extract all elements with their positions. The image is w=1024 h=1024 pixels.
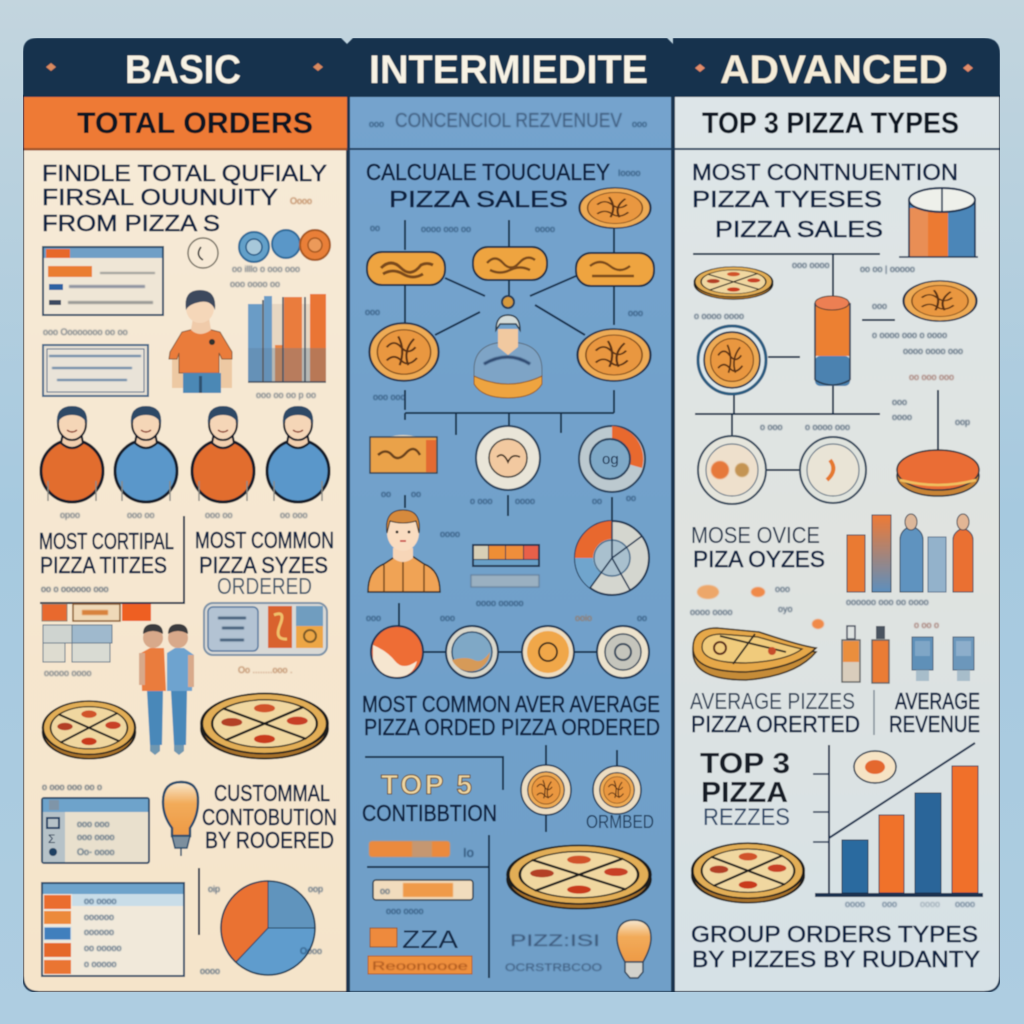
text block: group orders (691, 921, 980, 972)
rule box (365, 757, 503, 790)
panel: basic (23, 38, 347, 992)
window mockup: orders table (43, 247, 163, 315)
icon group: coins: oo illlo o ooo ooo (232, 264, 300, 274)
text block: calculate total pizza sales: CALCUALE TOUCUALEY (366, 159, 610, 185)
circle: step 1 (371, 626, 423, 678)
small captions: ooo (440, 613, 455, 623)
text block: calculate total pizza sales (366, 159, 641, 212)
icon: pizza oval (854, 751, 896, 783)
captions (365, 223, 643, 402)
pizza: oval right (904, 281, 976, 321)
circle: step 2 (446, 626, 498, 678)
donut chart (575, 521, 649, 595)
text block: most common pizza types: MOST CORTIPAL (39, 528, 174, 554)
captions: ooo (628, 308, 643, 318)
text block: most common pizza types: PIZZA TITZES (40, 552, 167, 578)
flow connectors (693, 254, 938, 470)
pill: pizza 3 (576, 253, 654, 286)
small orange marks and captions: oooo oooo (690, 607, 733, 617)
small orange marks and captions: oyo (778, 604, 793, 614)
table: query list: ooo oooo (77, 832, 115, 842)
icon: right header ornament (313, 63, 323, 71)
pizza: round left (369, 323, 439, 381)
layout rules (367, 835, 490, 978)
heading: top 3 pizza: TOP 3 (700, 748, 790, 780)
captions and stems: oo (626, 493, 636, 503)
bar chart: top pizzas: oooo (845, 899, 865, 909)
table: top contributors: oo oooo (84, 896, 117, 906)
icon group: coins: ooo oooo oo (230, 279, 280, 289)
pill: cream label: oo (380, 886, 390, 896)
bottom row icon: ring: og (602, 451, 619, 468)
heading: top 3 pizza: PIZZA (701, 777, 788, 809)
captions: ooo ooo (373, 392, 406, 402)
pill: pizza 1 (367, 252, 445, 285)
person in orange (139, 624, 166, 755)
pizza: wedge (693, 628, 816, 680)
captions and stems: oo (411, 489, 421, 499)
table: top contributors (42, 883, 184, 976)
small captions: ooio (575, 613, 592, 623)
captions (694, 260, 970, 432)
text block: calculate total pizza sales: Ioooo (618, 168, 641, 178)
text block: contribution by ordered: BY ROOERED (205, 827, 334, 853)
pill: cream label (373, 880, 473, 900)
text block: find total quantity: FROM PIZZA S (42, 210, 220, 236)
table: query list (42, 798, 149, 863)
text block: average pizza ordered (690, 688, 860, 737)
pizza: flat orange (897, 450, 979, 496)
chip bar (369, 841, 474, 860)
chart: cylinder share (899, 188, 978, 257)
captions: oooo ooo oo (421, 224, 471, 234)
pizza: top right (579, 188, 651, 228)
bars and figures chart (846, 514, 973, 607)
medallion: right (800, 437, 866, 503)
chip: revenue (368, 956, 472, 974)
text block: find total quantity: FINDLE TOTAL QUFIALY (42, 160, 327, 186)
captions: oo ooo ooo (909, 372, 954, 382)
caption: ooo oo oo p oo (256, 390, 316, 400)
table: query list: Oo- oooo (77, 847, 115, 857)
medallion: pizza (698, 326, 766, 394)
data cards (912, 620, 974, 681)
chip: revenue: Reoonoooe (372, 959, 468, 973)
intermediate panel body (349, 96, 672, 992)
text block: calculate total pizza sales: PIZZA SALES (389, 186, 568, 212)
subheading: top 3 pizza types: TOP 3 PIZZA TYPES (702, 107, 959, 140)
label: ordered: ORMBED (586, 812, 654, 832)
bottom row icon: tag (370, 435, 437, 473)
panel: advanced (673, 38, 1000, 992)
caption: ooooo oooo (44, 668, 92, 678)
divider (873, 690, 875, 735)
circle: step 4 (597, 626, 649, 678)
subheading: blurred revenue: ooo (369, 119, 384, 129)
text block: most consumption pizza types: PIZZA TYESES (692, 186, 882, 212)
chip and label: pizza: ZZA (402, 926, 458, 954)
icon: left header ornament (46, 63, 56, 71)
intermediate header band (347, 38, 673, 97)
blurred label (505, 931, 603, 974)
icon group: coins (188, 196, 330, 289)
text block: most ovice pizza sizes: PIZA OYZES (693, 546, 825, 572)
vertical tick line (198, 868, 200, 935)
table: top contributors: o ooooo (84, 959, 117, 969)
subheading: blurred revenue: CONCENCIOL REZVENUEV (395, 110, 623, 132)
text block: average revenue (889, 688, 980, 737)
text block: average revenue: AVERAGE (895, 688, 980, 714)
text block: most common pizza sizes ordered: MOST COMMON (195, 527, 334, 553)
pizza medallions (521, 745, 641, 832)
icon: left header ornament (695, 64, 705, 72)
card: size menu (204, 603, 327, 655)
text block: find total quantity (42, 160, 327, 236)
captions: oo (370, 223, 380, 233)
pizza: cut (508, 845, 650, 909)
captions: oooo (535, 224, 555, 234)
captions: ooo (365, 307, 380, 317)
orange and blue cylinder (815, 296, 850, 386)
pill: pizza 2 (473, 247, 547, 280)
pie chart: contribution (200, 881, 323, 976)
illustration: four customers (41, 406, 329, 520)
text block: most common average pizza ordered (362, 691, 660, 740)
text block: most ovice pizza sizes (691, 522, 825, 572)
text block: most common pizza types (39, 528, 174, 594)
text block: find total quantity: FIRSAL OUUNUITY (42, 184, 278, 210)
customer 2 (115, 406, 177, 502)
data cards: o oo o (914, 620, 939, 630)
window mockup: query results (43, 345, 148, 396)
subheading: blurred revenue: ooo (632, 119, 647, 129)
captions and stems: oooo (515, 496, 535, 506)
captions: o oooo oooo (694, 311, 744, 321)
medallion: left (698, 436, 766, 504)
heading: advanced: ADVANCED (720, 48, 948, 92)
illustration: person (169, 290, 232, 393)
chip bar: Io (463, 845, 474, 860)
small captions: oo (637, 613, 647, 623)
captions: oooo (892, 412, 912, 422)
basic panel body (23, 96, 347, 992)
segmented bar chart (471, 544, 540, 587)
captions and stems: o ooo (470, 496, 493, 506)
captions: ooo (892, 397, 907, 407)
text block: average pizza ordered: PIZZA ORERTED (691, 711, 860, 737)
label: contribution: CONTIBBTION (362, 800, 497, 826)
captions: ooo oooo (792, 260, 830, 270)
subheading: total orders: TOTAL ORDERS (77, 107, 313, 140)
customer 3 (192, 406, 254, 502)
table: query list: Σ (48, 832, 55, 846)
small captions (366, 613, 647, 623)
bottom row icon: plate (476, 426, 540, 490)
bottles (842, 626, 889, 683)
text block: average revenue: REVENUE (889, 711, 980, 737)
caption: oooo (440, 529, 460, 539)
table: top contributors: oooooo (84, 927, 114, 937)
divider line (24, 148, 347, 150)
text block: most consumption pizza types: PIZZA SALES (715, 216, 883, 242)
captions: ooo (872, 301, 887, 311)
text block: most common pizza sizes ordered (195, 527, 334, 599)
small captions: ooo (366, 613, 381, 623)
illustration: four customers: opoo (60, 510, 80, 520)
illustration: two people (139, 624, 194, 755)
basic header band (23, 38, 347, 97)
table: top contributors: oooooo (84, 912, 114, 922)
person in blue (167, 624, 194, 755)
pie chart: contribution: Oooo (300, 946, 322, 956)
pie chart: contribution: oip (208, 884, 220, 894)
chips row (42, 604, 151, 621)
small orange marks and captions: ooo (775, 584, 790, 594)
heading: top 3 pizza: REZZES (703, 804, 790, 831)
pizza: small (43, 701, 135, 759)
bar chart: top pizzas: oooo (955, 899, 975, 909)
text block: group orders: GROUP ORDERS TYPES (691, 921, 978, 947)
illustration: four customers: ooo oo (205, 510, 233, 520)
illustration: four customers: oo ooo (280, 510, 308, 520)
rule above pie (175, 867, 332, 869)
text block: most common pizza types: oo o oooooo ooo (41, 584, 109, 594)
flow connectors (405, 220, 614, 435)
advanced header band (673, 38, 1000, 97)
text block: contribution by ordered: CONTOBUTION (202, 804, 337, 830)
pizza: large bottom (692, 843, 804, 903)
caption row: oooo ooooo (476, 598, 524, 608)
icon: right header ornament (963, 64, 973, 72)
vertical divider (40, 516, 184, 603)
text block: most ovice pizza sizes: MOSE OVICE (691, 522, 820, 548)
pizza: oval left (695, 267, 772, 299)
circle: step 3 (522, 626, 574, 678)
icon: light bulb (163, 782, 198, 856)
table: top contributors: oo ooooo (84, 943, 122, 953)
text block: most common average pizza ordered: MOST COMMON AVER AVERAGE (362, 691, 660, 717)
captions: o ooo (760, 422, 783, 432)
bottom row icon: ring (579, 426, 645, 492)
captions: o oooo ooo o oooo (872, 330, 947, 340)
subheading band: total orders (24, 97, 347, 149)
divider line (674, 148, 999, 150)
captions: oo oo | ooooo (860, 264, 915, 274)
text block: most common pizza sizes ordered: PIZZA SYZES (199, 552, 328, 578)
text block: most consumption pizza types (692, 159, 958, 242)
bar chart: order counts (248, 294, 326, 382)
caption: ooo oooo (386, 906, 424, 916)
captions: oop (955, 417, 970, 427)
text block: average pizza ordered: AVERAGE PIZZES (690, 688, 855, 714)
small orange marks and captions (690, 584, 824, 629)
captions: Oo ........ooo . (238, 665, 293, 675)
heading: top 3 pizza (700, 748, 790, 831)
bar chart: top pizzas: ooo (882, 899, 897, 909)
panel: intermediate (347, 38, 673, 992)
pie chart: contribution: oop (308, 884, 323, 894)
text block: group orders: BY PIZZES BY RUDANTY (692, 946, 980, 972)
chip and label: pizza (370, 926, 458, 954)
text block: contribution by ordered (202, 780, 337, 853)
heading: intermediate: INTERMIEDITE (369, 48, 648, 92)
heading: basic: BASIC (125, 48, 241, 92)
captions and stems: oo (381, 489, 391, 499)
blurred label: PIZZ:ISI (510, 931, 600, 950)
bars and figures chart: oooooo ooo oo oooo (846, 597, 929, 607)
captions: oooo oooo ooo (903, 346, 963, 356)
captions and stems: oo (592, 496, 602, 506)
customer 4 (267, 406, 329, 502)
blurred label: OCRSTRBCOO (505, 962, 603, 974)
pizza: round right (578, 329, 650, 381)
bar chart: top pizzas: oooo (920, 899, 940, 909)
bar chart: top pizzas (813, 743, 983, 909)
advanced panel body (674, 96, 1000, 992)
caption: o ooo ooo oo o (42, 782, 102, 792)
divider line (349, 148, 672, 150)
customer 1 (41, 406, 103, 502)
illustration: four customers: ooo oo (127, 510, 155, 520)
pie chart: contribution: oooo (200, 966, 220, 976)
text block: most common average pizza ordered: PIZZA ORDED PIZZA ORDERED (364, 714, 660, 740)
heading: top 5: TOP 5 (381, 769, 472, 800)
caption: ooo Oooooooo oo oo (43, 327, 128, 337)
icon group: coins: Oooo (290, 196, 312, 206)
table: query list: ooo ooo (77, 819, 110, 829)
connector line (399, 603, 596, 652)
captions: o oooo ooo (805, 422, 850, 432)
pizza: large (202, 694, 327, 759)
text block: most consumption pizza types: MOST CONTNUENTION (692, 159, 958, 185)
illustration: analyst (368, 510, 440, 592)
captions and stems (381, 489, 636, 520)
text block: contribution by ordered: CUSTOMMAL (214, 780, 330, 806)
small table (43, 625, 112, 662)
icon: light bulb (617, 920, 651, 978)
central figure (474, 296, 542, 398)
text block: most common pizza sizes ordered: ORDERED (217, 573, 312, 599)
